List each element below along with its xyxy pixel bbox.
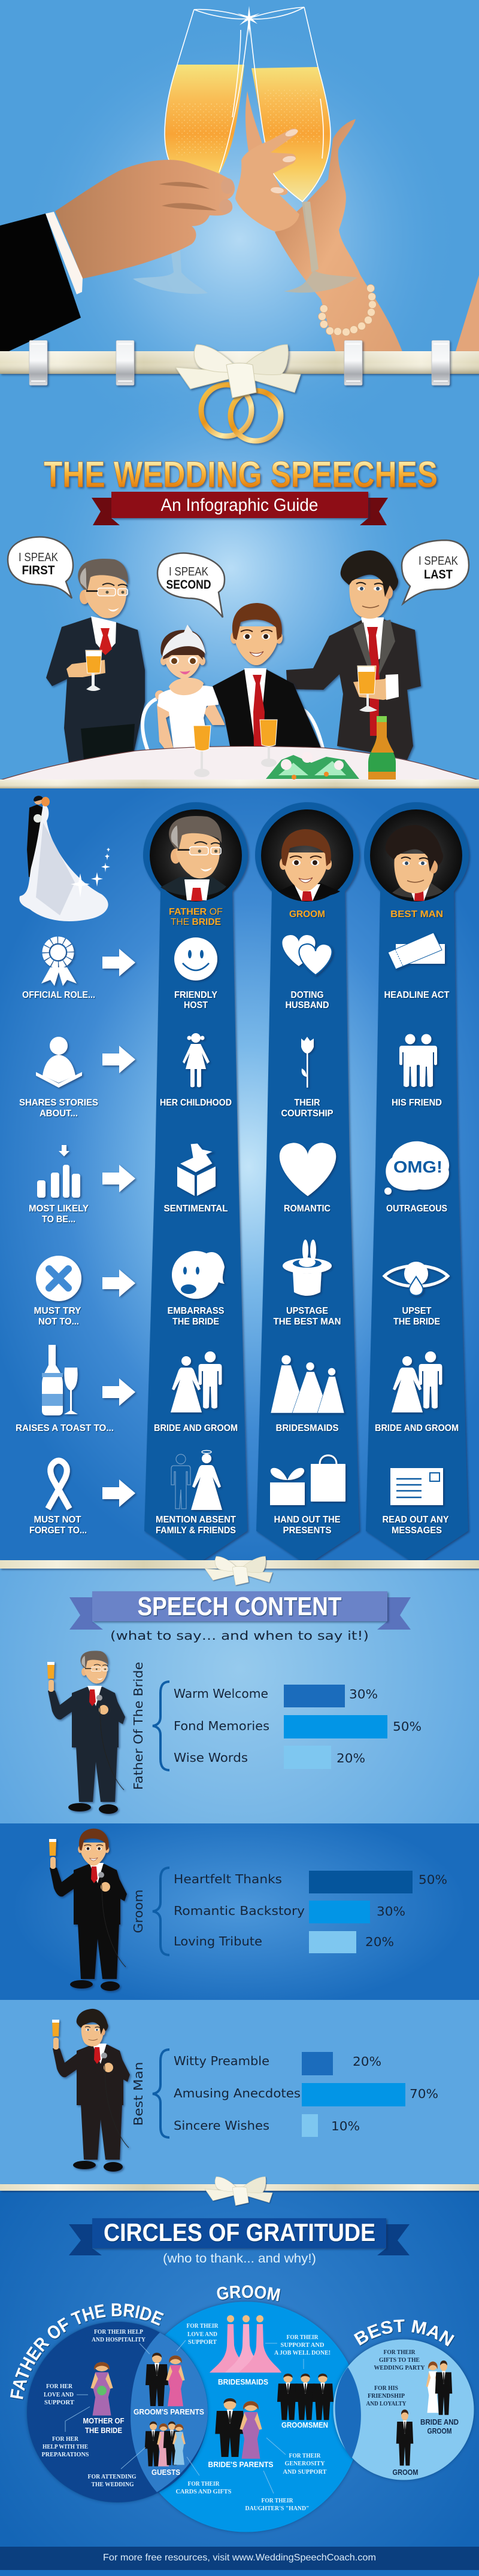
background: speech content section (0, 1567, 479, 2548)
arrow (102, 1269, 135, 1297)
figure: best man with microphone (52, 2009, 130, 2172)
text: father circle notes: FOR THEIR HELP (94, 2329, 144, 2336)
row labels: EMBARRASS (168, 1306, 225, 1316)
row labels: UPSET (402, 1306, 432, 1316)
figure: bridesmaids (210, 2315, 281, 2373)
text: best man circle notes: AND LOYALTY (366, 2401, 407, 2407)
row labels: DOTING (291, 990, 323, 1000)
row labels: HUSBAND (285, 1000, 329, 1010)
row labels (16, 1423, 459, 1433)
row: most likely to be (29, 1141, 449, 1225)
row labels: BRIDE AND GROOM (375, 1423, 459, 1433)
icon: pearl bracelet (319, 285, 376, 336)
subtitle banner: An Infographic Guide (160, 495, 319, 515)
row labels: HIS FRIEND (392, 1098, 442, 1108)
speech bubble: I speak last: LAST (424, 568, 453, 581)
row labels: MUST NOT (34, 1515, 81, 1525)
column headers: FATHER OF (169, 907, 223, 917)
icon: awareness ribbon (48, 1461, 69, 1509)
subtitle banner (92, 492, 388, 525)
text: best man circle notes: FOR HIS (374, 2385, 398, 2392)
text: best man circle notes: WEDDING PARTY (374, 2365, 425, 2371)
bar chart: father of the bride: 30% (349, 1687, 378, 1701)
row labels: RAISES A TOAST TO... (16, 1423, 114, 1433)
icon: wedding rings (201, 385, 281, 441)
column headers: GROOM (289, 909, 325, 919)
text: father circle notes: FOR HER (46, 2383, 72, 2390)
bar chart: best man: Witty Preamble (174, 2054, 269, 2068)
footer (0, 2547, 479, 2576)
figure: groomsmen (277, 2374, 334, 2420)
row labels: OUTRAGEOUS (386, 1204, 447, 1214)
bar chart: groom: 20% (365, 1935, 394, 1949)
tie panel: best man (364, 802, 469, 1565)
bar chart: father of the bride: 20% (336, 1751, 365, 1765)
row labels: THE BRIDE (172, 1317, 219, 1327)
portrait: father (150, 809, 242, 902)
text: best man circle notes: GROOM (393, 2468, 418, 2477)
row: raises a toast (16, 1345, 459, 1433)
row labels: MENTION ABSENT (156, 1515, 236, 1525)
venn diagram: circles of gratitude: BEST MAN (353, 2319, 455, 2347)
icon: rising bars with arrow (37, 1145, 80, 1198)
row labels: BRIDESMAIDS (275, 1423, 339, 1433)
row labels: MESSAGES (392, 1525, 442, 1536)
icon: flower bouquet (266, 752, 359, 780)
text: best man circle notes: BRIDE AND (420, 2417, 459, 2426)
bar chart: groom: Romantic Backstory (174, 1904, 305, 1918)
text: father circle notes (42, 2329, 204, 2488)
text: groom circle notes: LOVE AND (187, 2331, 217, 2338)
text: groom circle notes: FOR THEIR (286, 2334, 319, 2341)
figure: guests (145, 2422, 186, 2467)
text: best man circle notes (366, 2349, 459, 2477)
curved title: best man (359, 2332, 449, 2347)
label: father of the bride: Father Of The Bride (131, 1662, 145, 1790)
text: best man circle notes: FRIENDSHIP (368, 2393, 405, 2400)
icon: glass clink sparkle (237, 6, 260, 36)
text: groom circle notes: A JOB WELL DONE! (274, 2350, 331, 2356)
speech bubble: I speak second: I SPEAK (169, 565, 209, 578)
curved title: groom (217, 2298, 279, 2301)
brace (153, 1868, 169, 1955)
row labels: THE BRIDE (393, 1317, 440, 1327)
icon: crying eye (384, 1262, 448, 1296)
bar chart: father of the bride: 50% (393, 1719, 422, 1734)
text: groom circle notes: CARDS AND GIFTS (176, 2489, 232, 2495)
bar chart: best man: 10% (331, 2119, 360, 2133)
bar chart: best man: Sincere Wishes (174, 2118, 269, 2133)
ribbon divider with bow (0, 1557, 479, 1585)
background: roles section (0, 787, 479, 1561)
ribbon divider with bow (0, 2177, 479, 2206)
text: father circle notes: MOTHER OF (83, 2416, 125, 2425)
icon: rosette (41, 940, 77, 986)
icon: black jacket sleeve (0, 212, 83, 353)
row labels (29, 1204, 447, 1225)
icon: tickets (388, 933, 445, 969)
icon: cross in circle (36, 1256, 81, 1301)
text: groom circle notes: DAUGHTER'S "HAND" (245, 2505, 309, 2512)
icon: shocked face (172, 1251, 225, 1299)
arrow (102, 1378, 135, 1406)
text: groom circle notes: BRIDESMAIDS (218, 2377, 268, 2386)
arrow (102, 949, 135, 976)
text: best man circle notes: GIFTS TO THE (379, 2357, 420, 2364)
figure: bride (155, 625, 225, 750)
figure: father of the bride (46, 559, 145, 763)
text: groom circle notes: SUPPORT (188, 2339, 217, 2346)
curved title: father of the bride (23, 2316, 162, 2400)
text: groom circle notes: FOR THEIR (188, 2481, 220, 2487)
icon: rose (301, 1037, 314, 1088)
row labels: OFFICIAL ROLE... (22, 990, 95, 1000)
row labels: TO BE... (42, 1214, 75, 1225)
bar chart: best man: 20% (353, 2054, 381, 2069)
icon: woman's arm and thumb (275, 119, 403, 353)
bar chart: father of the bride: Wise Words (174, 1750, 248, 1765)
icon: bride and groom (171, 1351, 222, 1412)
portrait: best man (370, 809, 462, 902)
icon: champagne bottle (368, 716, 396, 780)
leader lines (65, 2340, 304, 2493)
figure: best man (286, 550, 421, 760)
footer: For more free resources, visit www.WeddingSpeechCoach.com (103, 2553, 376, 2563)
icon: woman's index finger (245, 91, 262, 168)
icon: big heart (280, 1143, 336, 1196)
text: groom circle notes (176, 2323, 331, 2512)
text: father circle notes: GUESTS (151, 2468, 180, 2477)
row labels (34, 1306, 440, 1327)
figure: groom mini (396, 2410, 413, 2466)
circle: best man (333, 2339, 474, 2480)
icon: man's hand (55, 160, 235, 279)
icon: two friends (399, 1034, 437, 1087)
bar chart: best man (174, 2052, 438, 2137)
icon: little girl (183, 1033, 210, 1088)
circle: father of the bride (27, 2322, 208, 2502)
text: father circle notes: THE WEDDING (91, 2481, 134, 2488)
circle: groom (131, 2302, 362, 2532)
text: father circle notes: FOR HER (52, 2436, 78, 2443)
bar chart: groom: Heartfelt Thanks (174, 1872, 282, 1886)
row labels (29, 1515, 449, 1536)
icon: smiley (174, 937, 217, 981)
subheading: who to thank: (who to thank... and why!) (163, 2252, 316, 2266)
figure: groom's parents (145, 2353, 185, 2406)
row labels: FORGET TO... (29, 1525, 87, 1536)
speech bubble: I speak second: SECOND (166, 578, 211, 592)
banner: circles of gratitude: CIRCLES OF GRATITUDE (104, 2218, 375, 2246)
row labels: ROMANTIC (284, 1204, 331, 1214)
arrow (102, 1046, 135, 1073)
text: father circle notes: HELP WITH THE (43, 2444, 88, 2450)
row labels: UPSTAGE (286, 1306, 328, 1316)
text: father circle notes: THE BRIDE (85, 2426, 122, 2435)
row labels: THEIR (295, 1098, 320, 1108)
icon: postcard (390, 1468, 443, 1505)
icon: two hearts (282, 935, 332, 975)
icon: absent figure and bride with halo (171, 1450, 222, 1510)
tie panel: father of the bride (143, 802, 248, 1565)
row labels: HER CHILDHOOD (160, 1098, 232, 1108)
speech bubble: I speak last: I SPEAK (419, 555, 459, 568)
icon: bride's shoulder (455, 275, 479, 353)
brace (153, 2050, 169, 2137)
text: groom circle notes: FOR THEIR (289, 2453, 321, 2459)
text: groom circle notes: AND SUPPORT (283, 2469, 327, 2475)
icon: magic hat with rabbit (283, 1240, 332, 1296)
text: father circle notes: AND HOSPITALITY (92, 2337, 145, 2343)
row labels: FAMILY & FRIENDS (156, 1525, 236, 1536)
icon: person reading (36, 1037, 82, 1088)
bar chart: father of the bride: Warm Welcome (174, 1686, 268, 1701)
bar chart: groom: Loving Tribute (174, 1934, 262, 1948)
row labels: NOT TO... (38, 1317, 79, 1327)
tie panel: groom (255, 802, 359, 1565)
figure: chairs (143, 699, 323, 751)
figure: mother of the bride (90, 2362, 113, 2416)
icon: open box (177, 1143, 216, 1196)
icon: bride and groom couple with sparkles (19, 796, 110, 921)
figure: groom (213, 603, 322, 749)
icon: gift and bag (270, 1456, 345, 1505)
bar chart: groom: 30% (377, 1904, 405, 1919)
brace (153, 1682, 169, 1770)
row: must try not to (34, 1240, 448, 1327)
banner: speech content: SPEECH CONTENT (138, 1592, 342, 1621)
row labels: BRIDE AND GROOM (154, 1423, 238, 1433)
row labels (22, 990, 450, 1010)
icon: flute on table 2 (260, 720, 277, 767)
text: father circle notes: LOVE AND (44, 2392, 74, 2398)
text: father circle notes: SUPPORT (44, 2400, 74, 2406)
speech bubble: I speak first: FIRST (22, 564, 55, 577)
icon: bottle and glass (42, 1345, 78, 1415)
venn diagram: circles of gratitude: FATHER OF THE BRIDE (10, 2303, 165, 2400)
icon: large ivory bow (175, 345, 301, 398)
row: must not forget (29, 1450, 449, 1536)
column headers: BEST MAN (390, 909, 443, 919)
icon: right champagne flute (249, 7, 357, 293)
figure: bride and groom mini (426, 2361, 452, 2415)
row labels: THE BEST MAN (273, 1317, 341, 1327)
text: groom circle notes: FOR THEIR (187, 2323, 219, 2330)
icon: woman's fingers (235, 128, 299, 232)
figure: father with microphone (47, 1651, 125, 1814)
subheading: what to say: (what to say… and when to say it!) (110, 1628, 369, 1643)
bar chart: father of the bride: Fond Memories (174, 1719, 269, 1733)
text: father circle notes: GROOM'S PARENTS (134, 2407, 204, 2416)
row labels: MUST TRY (34, 1306, 81, 1316)
bar chart: best man: 70% (410, 2087, 438, 2101)
row labels: SHARES STORIES (19, 1098, 98, 1108)
icon: bridesmaids (271, 1355, 344, 1413)
row labels: SENTIMENTAL (164, 1204, 228, 1214)
text: best man circle notes: GROOM (428, 2426, 451, 2435)
row labels: COURTSHIP (281, 1109, 334, 1119)
column headers (169, 907, 443, 927)
icon: left champagne flute (133, 10, 249, 294)
figure: bride's parents (215, 2398, 262, 2459)
overlap: groom and best man (335, 2367, 361, 2459)
column headers: THE BRIDE (171, 917, 221, 927)
row labels: HEADLINE ACT (384, 990, 450, 1000)
row labels: PRESENTS (283, 1525, 332, 1536)
bar chart: best man: Amusing Anecdotes (174, 2086, 301, 2100)
decorative ribbon with silver clips (0, 340, 479, 385)
portrait: groom (261, 809, 353, 902)
speech bubble: I speak second (157, 553, 225, 617)
hero: toasting glasses and hands (0, 6, 479, 353)
row: official role (22, 933, 450, 1010)
bar chart: groom: 50% (419, 1872, 447, 1887)
text: father circle notes: FOR ATTENDING (87, 2474, 137, 2480)
text: father circle notes: PREPARATIONS (42, 2452, 89, 2458)
bar chart: father of the bride (174, 1685, 422, 1769)
text: groom circle notes: SUPPORT AND (280, 2342, 325, 2349)
row labels: HOST (184, 1000, 208, 1010)
text: groom circle notes: GENEROSITY (285, 2461, 325, 2467)
venn diagram: circles of gratitude (10, 2285, 475, 2534)
row labels: READ OUT ANY (382, 1515, 449, 1525)
text: groom circle notes: BRIDE'S PARENTS (208, 2460, 274, 2469)
arrow (102, 1165, 135, 1192)
speech bubble: I speak first (8, 537, 73, 598)
icon: flute on table 1 (193, 726, 211, 777)
venn diagram: circles of gratitude: GROOM (217, 2285, 281, 2302)
table with flutes, flowers and champagne (0, 716, 479, 780)
overlap: father and groom (131, 2333, 208, 2492)
speech bubble: I speak first: I SPEAK (19, 551, 59, 564)
banner: speech content (69, 1591, 411, 1630)
bar chart: groom (174, 1871, 447, 1953)
row labels: FRIENDLY (174, 990, 217, 1000)
speech bubble: I speak last (402, 540, 469, 604)
table ribbon divider (0, 780, 479, 788)
text: groom circle notes: GROOMSMEN (281, 2420, 328, 2429)
text: best man circle notes: FOR THEIR (383, 2349, 416, 2356)
arrow (102, 1479, 135, 1507)
background: top sky (0, 0, 479, 788)
banner: circles of gratitude (69, 2218, 410, 2255)
icon: OMG cloud (384, 1141, 449, 1195)
icon: bride and groom (best man column) (392, 1351, 442, 1412)
row labels: ABOUT... (40, 1109, 78, 1119)
label: groom: Groom (131, 1889, 145, 1933)
row labels (19, 1098, 442, 1119)
icon: OMG cloud: OMG! (393, 1158, 442, 1176)
row labels: MOST LIKELY (29, 1204, 89, 1214)
row: shares stories (19, 1033, 442, 1119)
text: groom circle notes: FOR THEIR (261, 2498, 293, 2504)
row labels: HAND OUT THE (274, 1515, 341, 1525)
figure: groom with microphone (49, 1829, 127, 1991)
label: best man: Best Man (131, 2062, 145, 2126)
